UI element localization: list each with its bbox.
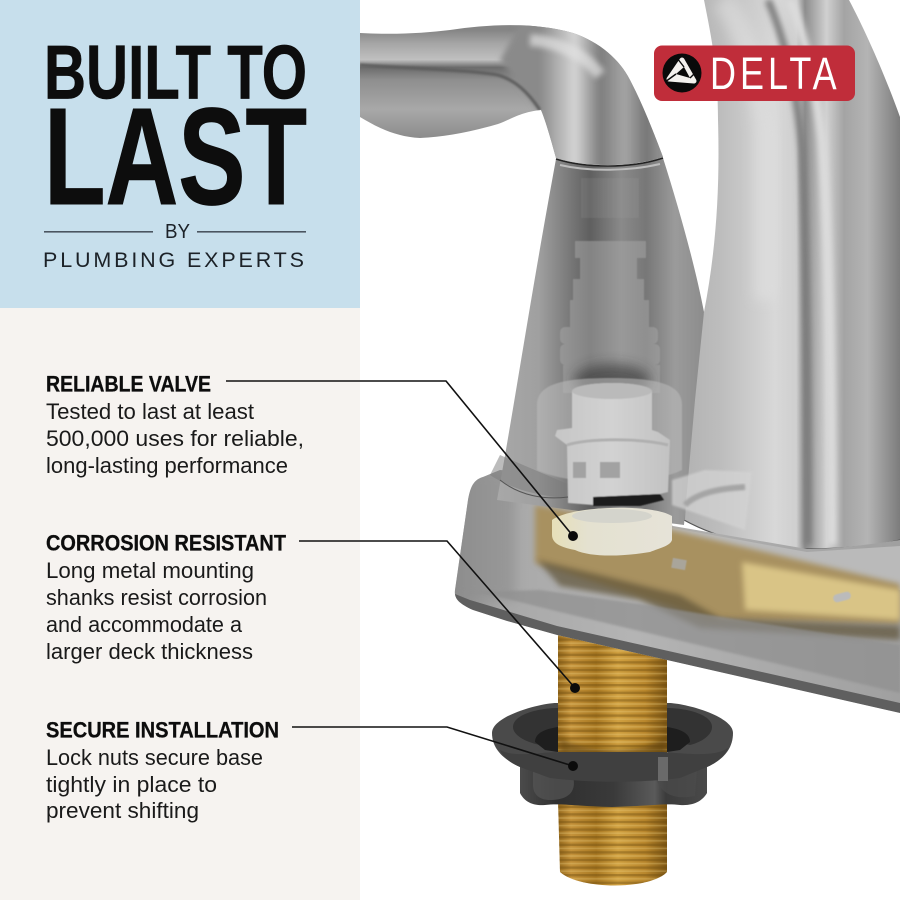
base plate: [455, 470, 900, 713]
feature: secure installation: SECURE INSTALLATION: [46, 718, 279, 742]
feature: secure installation: prevent shifting: [46, 798, 199, 823]
feature: secure installation: [46, 718, 279, 823]
wordmark: DELTA: [710, 48, 841, 99]
lower shank: [558, 800, 667, 886]
feature: secure installation: Lock nuts secure base: [46, 745, 263, 770]
white retaining nut: [552, 508, 672, 556]
feature: corrosion resistant: shanks resist corrosion: [46, 585, 267, 610]
feature: secure installation: tightly in place to: [46, 772, 217, 797]
nut front lip: [500, 748, 728, 782]
feature: reliable valve: 500,000 uses for reliable,: [46, 426, 304, 451]
feature: corrosion resistant: CORROSION RESISTANT: [46, 530, 287, 556]
feature: corrosion resistant: Long metal mounting: [46, 558, 254, 583]
heading: last: LAST: [44, 80, 307, 234]
valve stem: [560, 178, 660, 393]
feature: corrosion resistant: [46, 530, 287, 664]
feature: reliable valve: long-lasting performance: [46, 453, 288, 478]
back spout: [684, 0, 900, 549]
lock nut and lower shank: [492, 703, 733, 886]
leader: secure installation: [292, 727, 578, 771]
feature: reliable valve: RELIABLE VALVE: [46, 372, 211, 396]
nut flange back: [492, 703, 558, 767]
feature: corrosion resistant: larger deck thickness: [46, 639, 253, 664]
nut body: [520, 767, 707, 807]
icon: delta triangle: [662, 54, 702, 92]
feature: reliable valve: [46, 372, 304, 478]
leader: reliable valve: [226, 381, 578, 541]
lever handle: [360, 25, 663, 165]
panel: features: [0, 308, 360, 900]
feature: reliable valve: Tested to last at least: [46, 399, 254, 424]
heading: built to: BUILT TO: [44, 30, 307, 116]
subheading: by: BY: [165, 221, 190, 243]
mounting deck detail: [672, 470, 752, 530]
panel: title block: [0, 0, 360, 308]
feature: corrosion resistant: and accommodate a: [46, 612, 243, 637]
shank: upper thread: [558, 628, 667, 758]
faucet illustration: [455, 0, 900, 758]
leader: corrosion resistant: [299, 541, 580, 693]
valve body with transparent cone: [490, 158, 752, 556]
brass inner layer: [535, 505, 900, 624]
valve cartridge: [537, 378, 682, 506]
subheading: plumbing experts: PLUMBING EXPERTS: [43, 248, 304, 272]
logo: delta: [654, 46, 855, 101]
